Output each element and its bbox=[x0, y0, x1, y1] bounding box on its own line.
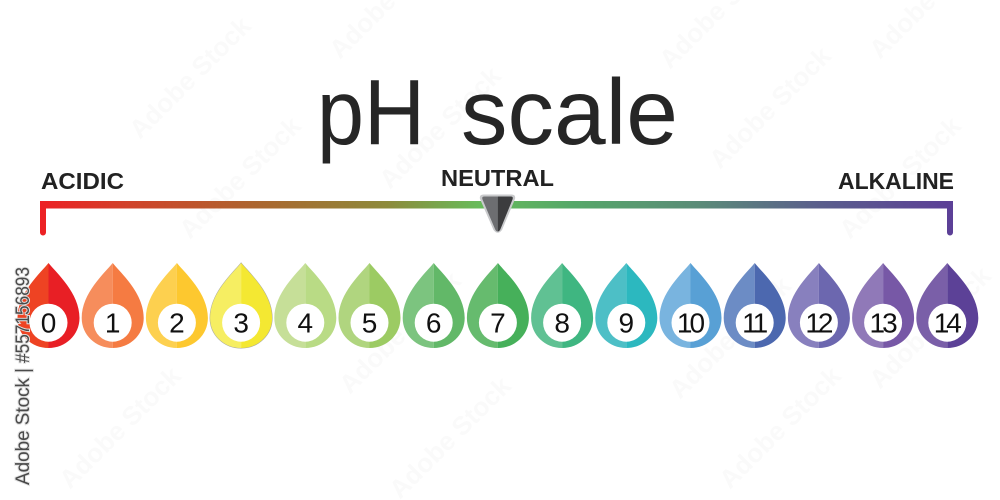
watermark pattern: Adobe Stock bbox=[703, 40, 837, 174]
watermark pattern: Adobe Stock bbox=[173, 110, 307, 244]
drop 14: 14 bbox=[934, 308, 961, 339]
drop 13: 13 bbox=[870, 308, 897, 339]
watermark pattern: Adobe Stock bbox=[333, 265, 467, 399]
drop 7 bbox=[467, 263, 529, 348]
label: neutral: NEUTRAL bbox=[441, 165, 554, 191]
drop 13 bbox=[852, 263, 914, 348]
watermark pattern: Adobe Stock bbox=[833, 110, 967, 244]
side stock id text bbox=[13, 267, 34, 485]
drop 9: 9 bbox=[619, 308, 634, 339]
drop 4: 4 bbox=[298, 308, 313, 339]
watermark pattern: Adobe Stock bbox=[373, 60, 507, 194]
drop 5: 5 bbox=[362, 308, 377, 339]
label: acidic: ACIDIC bbox=[41, 168, 124, 194]
title: pH bbox=[317, 60, 425, 164]
drop 3 bbox=[210, 263, 272, 348]
title bbox=[317, 60, 678, 164]
drop 12: 12 bbox=[805, 308, 833, 339]
drop 12 bbox=[788, 263, 850, 348]
side stock id text: | bbox=[13, 368, 34, 373]
drop 10: 10 bbox=[677, 308, 704, 339]
title: scale bbox=[461, 60, 678, 164]
drop 2: 2 bbox=[169, 308, 185, 339]
drop 7: 7 bbox=[490, 308, 506, 339]
drop 2 bbox=[146, 263, 208, 348]
neutral marker bbox=[480, 194, 515, 233]
side stock id text: Adobe Stock bbox=[13, 378, 34, 485]
drop 6 bbox=[403, 263, 465, 348]
watermark pattern: Adobe Stock bbox=[663, 270, 797, 404]
drop 8: 8 bbox=[554, 308, 570, 339]
drop 1 bbox=[82, 263, 144, 348]
label: alkaline: ALKALINE bbox=[838, 168, 954, 194]
drop 14 bbox=[916, 263, 978, 348]
drop 4 bbox=[274, 263, 336, 348]
drop 3: 3 bbox=[233, 308, 249, 339]
drop 10 bbox=[660, 263, 722, 348]
drop 11: 11 bbox=[742, 308, 768, 339]
gradient bracket bar bbox=[40, 201, 953, 236]
drop 1: 1 bbox=[105, 308, 120, 339]
drop 0: 0 bbox=[41, 308, 56, 339]
watermark pattern: Adobe Stock bbox=[53, 360, 187, 494]
watermark pattern: Adobe Stock bbox=[123, 10, 257, 144]
drop 0 bbox=[18, 263, 80, 348]
watermark pattern: Adobe Stock bbox=[863, 260, 997, 394]
drop 9 bbox=[595, 263, 657, 348]
drop 6: 6 bbox=[426, 308, 441, 339]
watermark pattern: Adobe Stock bbox=[713, 360, 847, 494]
drop 8 bbox=[531, 263, 593, 348]
side stock id text: #557156893 bbox=[13, 267, 34, 363]
drop 5 bbox=[338, 263, 400, 348]
drop 11 bbox=[724, 263, 786, 348]
